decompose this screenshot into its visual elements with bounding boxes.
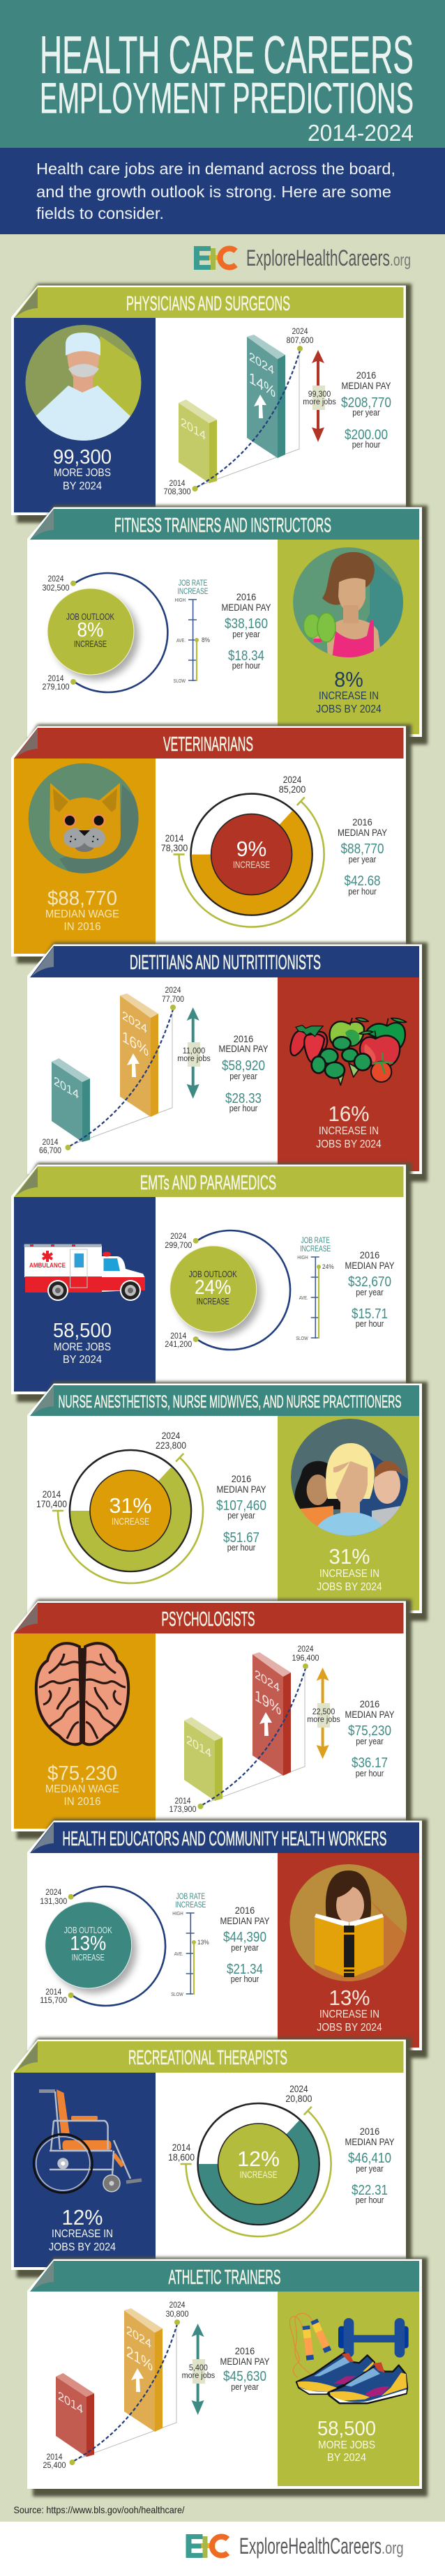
median pay: per year <box>352 408 380 418</box>
stat: more jobs <box>53 446 112 492</box>
chart: job outlook circle: 302,500 <box>42 583 70 593</box>
median pay: per year <box>356 1288 384 1297</box>
stat: median wage <box>45 1762 119 1808</box>
median pay: MEDIAN PAY <box>216 1484 266 1495</box>
chart: job rate scale: INCREASE <box>300 1245 331 1253</box>
median pay: $45,630 <box>223 2369 266 2384</box>
median pay: 2016 <box>360 1249 379 1260</box>
heading <box>14 728 403 759</box>
median pay: $46,410 <box>348 2151 391 2166</box>
median pay: per year <box>227 1511 255 1521</box>
arrow: more jobs <box>303 350 336 442</box>
chart: job outlook circle: 13% <box>70 1933 106 1955</box>
median pay: 2016 <box>356 369 376 381</box>
stat: median wage: $88,770 <box>47 887 117 910</box>
median pay: per year <box>356 2164 384 2174</box>
median pay: $15.71 <box>352 1306 388 1322</box>
chart: job outlook circle: JOB OUTLOOK <box>189 1270 237 1279</box>
chart: isometric bars: 2024 <box>165 986 181 995</box>
median pay: per year <box>231 2382 259 2392</box>
chart: ring: 85,200 <box>279 784 306 795</box>
median pay: 2016 <box>232 1473 251 1484</box>
logo: top: .org <box>390 251 411 270</box>
icon: brain <box>36 1643 128 1744</box>
chart: job rate scale: JOB RATE <box>301 1237 330 1245</box>
panel: recreational therapists <box>11 2038 412 2278</box>
arrow: more jobs <box>177 1007 211 1099</box>
footer strip <box>0 2522 445 2576</box>
stat: increase in jobs <box>316 1102 382 1150</box>
median pay: per year <box>356 1737 384 1746</box>
chart: ring: 223,800 <box>156 1440 186 1451</box>
heading <box>30 509 419 540</box>
median pay: MEDIAN PAY <box>220 1915 270 1926</box>
arrow: more jobs: 22,500 <box>312 1708 335 1716</box>
logo: top <box>194 245 411 270</box>
median pay: per hour <box>352 440 380 450</box>
chart: job rate scale: SLOW <box>171 1992 183 1997</box>
stat: more jobs: BY 2024 <box>63 480 102 492</box>
stat: median wage: MEDIAN WAGE <box>45 1783 119 1795</box>
stat: increase in jobs: 16% <box>328 1102 370 1126</box>
stat: more jobs: BY 2024 <box>327 2452 366 2464</box>
stat: median wage <box>45 887 119 933</box>
chart: job rate scale <box>296 1237 334 1341</box>
title: 2014-2024 <box>308 120 414 146</box>
median pay: 2016 <box>360 1698 379 1709</box>
median pay <box>345 1249 395 1329</box>
chart: job rate scale: HIGH <box>174 598 186 603</box>
title <box>40 26 414 146</box>
chart: ring: 31% <box>109 1493 152 1518</box>
stat: increase in jobs: INCREASE IN <box>319 2009 379 2020</box>
median pay: MEDIAN PAY <box>338 827 388 838</box>
chart: isometric bars: 2014 <box>169 480 186 488</box>
median pay: $58,920 <box>222 1058 265 1074</box>
chart: job outlook circle <box>42 573 167 692</box>
chart: isometric bars: 19% <box>255 1686 281 1719</box>
chart: job rate scale: SLOW <box>296 1336 308 1341</box>
median pay: per hour <box>348 887 377 897</box>
chart: job rate scale: HIGH <box>172 1912 183 1916</box>
median pay: MEDIAN PAY <box>345 2136 395 2147</box>
panel: psychologists <box>11 1599 412 1839</box>
chart: isometric bars: 196,400 <box>292 1654 319 1663</box>
chart: job outlook circle: INCREASE <box>74 639 107 649</box>
median pay: 2016 <box>235 1905 255 1916</box>
stat: increase in jobs: JOBS BY 2024 <box>316 703 382 715</box>
median pay <box>220 2345 270 2392</box>
heading <box>30 1822 419 1853</box>
median pay <box>220 1905 270 1984</box>
chart: isometric bars: 21% <box>126 2342 153 2375</box>
stat: more jobs: 58,500 <box>317 2418 376 2440</box>
chart: job rate scale: INCREASE <box>175 1901 206 1910</box>
chart: job outlook circle: 8% <box>77 619 103 641</box>
chart: ring: 18,600 <box>168 2152 195 2163</box>
stat: increase in jobs: INCREASE IN <box>319 690 379 702</box>
arrow: more jobs: more jobs <box>177 1055 211 1063</box>
chart: ring: 9% <box>236 837 266 861</box>
chart: isometric bars: 2014 <box>181 414 206 443</box>
chart: isometric bars <box>39 986 184 1155</box>
chart: job rate scale: JOB RATE <box>176 1893 205 1901</box>
stat: increase in jobs: JOBS BY 2024 <box>49 2241 116 2253</box>
icon: fruit and vegetables <box>290 1018 407 1085</box>
stat: increase in jobs: 12% <box>61 2205 103 2230</box>
panel: physicians and surgeons <box>11 284 412 523</box>
heading <box>30 2261 419 2292</box>
median pay: $28.33 <box>225 1091 262 1106</box>
median pay: per hour <box>231 1974 259 1984</box>
median pay <box>222 591 271 671</box>
median pay: $22.31 <box>352 2183 388 2198</box>
chart: isometric bars <box>43 2301 188 2470</box>
chart: ring: 12% <box>237 2147 280 2171</box>
stat: median wage: MEDIAN WAGE <box>45 908 119 920</box>
median pay <box>219 1033 269 1113</box>
chart: ring: INCREASE <box>240 2169 278 2180</box>
median pay: MEDIAN PAY <box>342 380 391 391</box>
chart: isometric bars <box>163 328 314 496</box>
chart: isometric bars: 2024 <box>122 1007 147 1036</box>
chart: job outlook circle: 24% <box>195 1276 231 1299</box>
chart: job rate scale: INCREASE <box>177 588 209 596</box>
icon: woman reading <box>289 1864 412 1987</box>
chart: ring: INCREASE <box>233 859 270 870</box>
chart: isometric bars: 25,400 <box>43 2462 66 2470</box>
median pay <box>338 816 388 897</box>
source note: Source: https://www.bls.gov/ooh/healthcare/ <box>14 2504 185 2515</box>
chart: job outlook circle: INCREASE <box>197 1297 229 1306</box>
header banner <box>0 0 445 148</box>
median pay: MEDIAN PAY <box>345 1709 395 1720</box>
median pay: per year <box>231 1943 259 1953</box>
panel: health educators and community health workers <box>27 1819 428 2058</box>
stat: more jobs: 58,500 <box>53 1320 112 1342</box>
stat: more jobs <box>53 1320 112 1366</box>
heading: VETERINARIANS <box>163 733 253 756</box>
panel: dietitians and nutritionists <box>27 943 428 1182</box>
stat: increase in jobs: 13% <box>329 1986 370 2010</box>
chart: ring: 2014 <box>43 1489 61 1500</box>
panel: veterinarians <box>11 724 412 963</box>
panel: fitness trainers and instructors <box>27 505 428 745</box>
chart: job rate scale <box>171 1893 209 1997</box>
stat: increase in jobs <box>317 1544 382 1593</box>
median pay: MEDIAN PAY <box>345 1260 395 1271</box>
chart: ring: 170,400 <box>36 1499 67 1509</box>
chart: isometric bars: 173,900 <box>169 1806 197 1814</box>
chart: job rate scale: AVE. <box>174 1952 183 1957</box>
chart: job outlook circle: INCREASE <box>72 1953 105 1963</box>
median pay: $44,390 <box>223 1930 266 1945</box>
stat: more jobs: MORE JOBS <box>318 2439 375 2451</box>
chart: job rate scale: AVE. <box>299 1296 308 1301</box>
arrow: more jobs: 5,400 <box>189 2364 208 2372</box>
heading <box>14 2041 403 2073</box>
chart: job rate scale: 24% <box>322 1263 334 1270</box>
chart: isometric bars: 30,800 <box>166 2310 188 2319</box>
heading: RECREATIONAL THERAPISTS <box>128 2047 287 2069</box>
heading: PHYSICIANS AND SURGEONS <box>126 293 290 315</box>
chart: isometric bars: 2024 <box>126 2322 151 2351</box>
median pay: $200.00 <box>345 427 388 443</box>
median pay: $36.17 <box>352 1755 388 1771</box>
median pay: MEDIAN PAY <box>219 1043 269 1054</box>
median pay: $208,770 <box>341 395 391 411</box>
intro text block: fields to consider. <box>36 204 164 222</box>
chart: job rate scale: JOB RATE <box>179 579 207 588</box>
chart: job outlook circle <box>40 1887 165 2006</box>
stat: increase in jobs: JOBS BY 2024 <box>317 2022 382 2034</box>
arrow: more jobs <box>307 1668 340 1759</box>
median pay: $18.34 <box>228 648 264 664</box>
panel: emts and paramedics <box>11 1163 412 1402</box>
heading <box>14 1166 403 1197</box>
chart: isometric bars: 2014 <box>58 2388 83 2416</box>
chart: job outlook circle: 299,700 <box>165 1240 192 1250</box>
arrow: more jobs <box>182 2324 215 2415</box>
chart: ring <box>168 2084 331 2236</box>
arrow: more jobs: more jobs <box>182 2372 215 2380</box>
stat: more jobs: MORE JOBS <box>54 467 111 479</box>
chart: job outlook circle: 2014 <box>45 1987 61 1997</box>
chart: ring <box>36 1431 203 1583</box>
chart: job outlook circle: 2024 <box>47 574 64 584</box>
stat: increase in jobs: 31% <box>329 1544 370 1569</box>
median pay <box>216 1473 266 1553</box>
median pay: per year <box>232 630 260 639</box>
arrow: more jobs: 99,300 <box>308 390 331 399</box>
chart: ring: 2024 <box>289 2084 308 2094</box>
median pay: MEDIAN PAY <box>222 602 271 613</box>
heading: EMTs AND PARAMEDICS <box>140 1172 276 1194</box>
stat: increase in jobs: JOBS BY 2024 <box>317 1581 382 1593</box>
arrow: more jobs: 11,000 <box>183 1047 205 1055</box>
chart: isometric bars: 2014 <box>54 1073 79 1102</box>
icon: three nurses <box>291 1419 408 1536</box>
icon: ambulance <box>24 1244 145 1301</box>
stat: median wage: $75,230 <box>47 1762 117 1785</box>
median pay <box>341 369 391 450</box>
chart: job outlook circle: JOB OUTLOOK <box>64 1926 112 1935</box>
chart: isometric bars: 2024 <box>255 1666 280 1695</box>
chart: ring <box>161 775 324 927</box>
chart: job rate scale: 13% <box>197 1939 209 1946</box>
stat: median wage: IN 2016 <box>64 921 100 933</box>
median pay: 2016 <box>236 591 256 602</box>
stat: increase in jobs <box>317 1986 382 2034</box>
chart: job rate scale: AVE. <box>176 639 186 643</box>
icon: wheelchair <box>33 2089 142 2193</box>
chart: job rate scale: 8% <box>202 637 210 643</box>
chart: isometric bars: 2024 <box>292 328 308 336</box>
icon: woman with dumbbell <box>293 547 406 659</box>
stat: more jobs: MORE JOBS <box>54 1341 111 1353</box>
chart: job outlook circle: 131,300 <box>40 1896 67 1906</box>
chart: ring: 78,300 <box>161 843 188 853</box>
chart: job outlook circle: JOB OUTLOOK <box>66 612 115 622</box>
chart: job outlook circle: 241,200 <box>165 1339 192 1349</box>
arrow: more jobs: more jobs <box>303 398 336 406</box>
chart: ring: 2024 <box>283 775 302 785</box>
chart: job rate scale: SLOW <box>173 679 186 684</box>
stat: increase in jobs <box>316 667 382 715</box>
median pay: per hour <box>229 1104 257 1113</box>
stat: increase in jobs: 8% <box>334 667 363 692</box>
stat: more jobs <box>317 2418 376 2464</box>
heading <box>30 1385 419 1416</box>
chart: isometric bars: 66,700 <box>39 1147 61 1155</box>
chart: job rate scale <box>173 579 210 684</box>
median pay <box>345 1698 395 1778</box>
chart: job outlook circle: 279,100 <box>42 682 70 692</box>
chart: isometric bars: 2014 <box>42 1138 59 1147</box>
stat: median wage: IN 2016 <box>64 1796 100 1808</box>
stat: more jobs: BY 2024 <box>63 1354 102 1366</box>
heading <box>30 946 419 977</box>
median pay: per hour <box>232 661 260 671</box>
stat: increase in jobs: JOBS BY 2024 <box>316 1138 382 1150</box>
chart: job outlook circle: 2024 <box>45 1887 61 1897</box>
median pay: $75,230 <box>348 1723 391 1739</box>
median pay: $38,160 <box>225 616 268 632</box>
chart: isometric bars: 2024 <box>169 2301 186 2310</box>
arrow: more jobs: more jobs <box>307 1716 340 1724</box>
median pay: $21.34 <box>227 1962 263 1977</box>
icon: surgeon <box>25 325 143 446</box>
chart: ring: 2014 <box>172 2142 191 2153</box>
icon: ambulance: AMBULANCE <box>29 1262 66 1270</box>
chart: job rate scale: HIGH <box>297 1256 308 1260</box>
chart: isometric bars: 2024 <box>249 349 274 377</box>
median pay: $51.67 <box>223 1530 259 1546</box>
median pay: 2016 <box>234 1033 253 1044</box>
stat: more jobs: 99,300 <box>53 446 112 468</box>
chart: job outlook circle: 2014 <box>170 1331 186 1341</box>
chart: job outlook circle: 2014 <box>47 673 64 683</box>
intro text block: Health care jobs are in demand across the board, <box>36 160 395 178</box>
chart: isometric bars: 16% <box>122 1028 149 1060</box>
median pay: per year <box>229 1072 257 1081</box>
chart: ring: 20,800 <box>285 2094 312 2104</box>
chart: isometric bars <box>169 1645 319 1814</box>
chart: isometric bars: 807,600 <box>286 337 314 345</box>
median pay: MEDIAN PAY <box>220 2356 270 2367</box>
chart: ring: 2024 <box>162 1431 181 1441</box>
median pay: per year <box>349 855 376 864</box>
logo: bottom <box>186 2533 403 2559</box>
stat: increase in jobs: INCREASE IN <box>52 2228 113 2240</box>
chart: isometric bars: 708,300 <box>163 488 191 496</box>
median pay: $32,670 <box>348 1274 391 1290</box>
median pay: per hour <box>227 1543 255 1553</box>
chart: isometric bars: 2014 <box>186 1732 211 1760</box>
median pay: per hour <box>356 2195 384 2205</box>
chart: ring: 2014 <box>165 833 184 844</box>
heading <box>14 1603 403 1633</box>
median pay: 2016 <box>352 816 372 828</box>
chart: isometric bars: 2024 <box>297 1645 314 1654</box>
median pay: per hour <box>356 1769 384 1778</box>
intro text block <box>0 148 445 234</box>
intro text block: and the growth outlook is strong. Here are some <box>36 183 391 201</box>
chart: isometric bars: 2014 <box>174 1797 191 1806</box>
median pay: $88,770 <box>340 841 384 857</box>
icon: dog <box>29 763 139 878</box>
chart: isometric bars: 77,700 <box>162 996 184 1004</box>
median pay: 2016 <box>360 2126 379 2137</box>
heading: ATHLETIC TRAINERS <box>169 2266 280 2289</box>
stat: increase in jobs <box>49 2205 116 2253</box>
panel: nurse anesthetists, midwives, practitioners <box>27 1382 428 1621</box>
median pay: 2016 <box>235 2345 255 2356</box>
panel: athletic trainers <box>27 2257 428 2497</box>
median pay: $42.68 <box>345 874 381 889</box>
icon: fitness gear <box>289 2313 409 2403</box>
chart: job outlook circle: 2024 <box>170 1231 186 1241</box>
median pay: $107,460 <box>216 1498 266 1514</box>
chart: isometric bars: 14% <box>249 369 276 402</box>
chart: job outlook circle <box>165 1230 290 1350</box>
stat: increase in jobs: INCREASE IN <box>319 1125 379 1137</box>
chart: job outlook circle: 115,700 <box>40 1995 67 2005</box>
median pay <box>345 2126 395 2205</box>
heading: PSYCHOLOGISTS <box>162 1608 255 1631</box>
stat: increase in jobs: INCREASE IN <box>319 1568 379 1580</box>
median pay: per hour <box>356 1319 384 1329</box>
logo: bottom: .org <box>382 2539 403 2558</box>
chart: isometric bars: 2014 <box>46 2453 63 2462</box>
heading <box>14 287 403 318</box>
chart: ring: INCREASE <box>112 1516 149 1527</box>
